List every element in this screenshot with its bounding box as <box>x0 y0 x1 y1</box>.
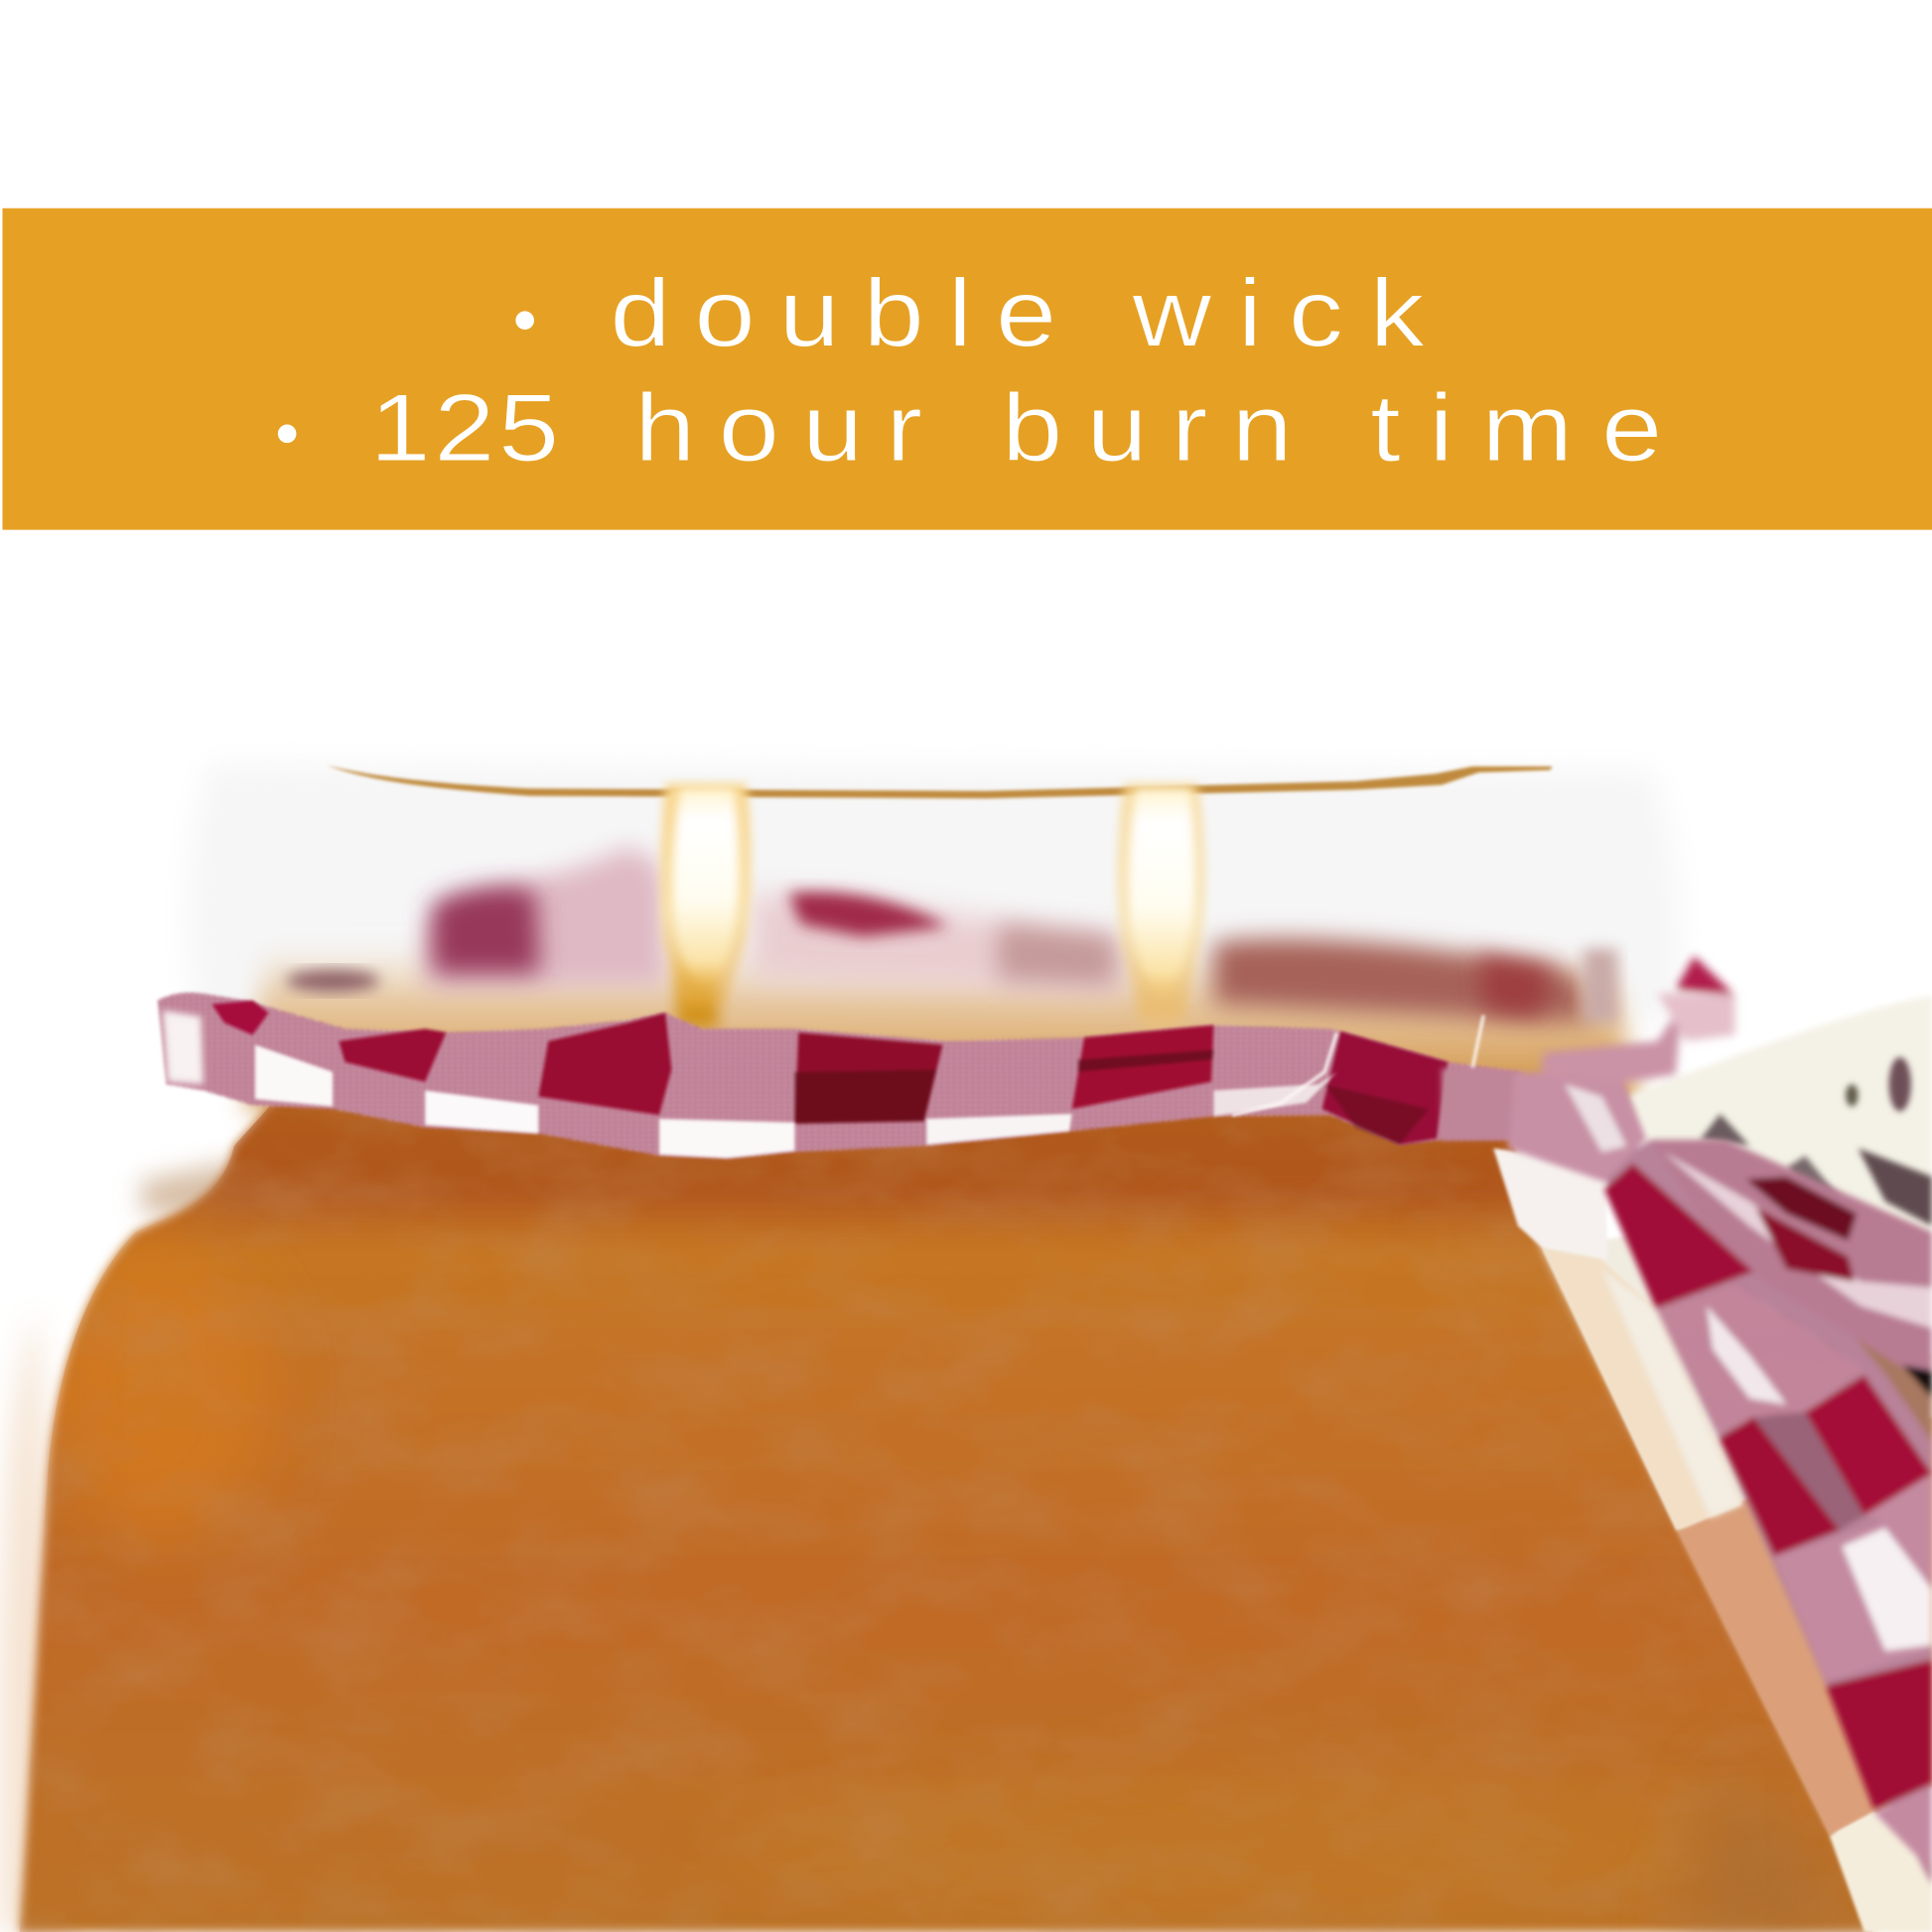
banner background <box>2 208 1932 530</box>
banner <box>2 208 1932 530</box>
tag edge backing: cream, peach and shadow <box>1543 1232 1932 1530</box>
flames <box>660 783 1205 1029</box>
frayed threads <box>1232 1016 1483 1115</box>
feature line: double wick: double <box>610 259 1056 366</box>
feature line: 125 hour burn time: 125 <box>369 373 559 482</box>
feature line: 125 hour burn time <box>278 373 1662 482</box>
tag print marks <box>1701 1057 1932 1226</box>
crimson checks <box>211 1001 1448 1145</box>
flame: right wick <box>1117 783 1205 1029</box>
feature line: 125 hour burn time: time <box>1370 373 1662 482</box>
knot <box>1442 1068 1514 1140</box>
wax surface behind glass <box>246 942 1639 1109</box>
hang tag <box>1493 996 1932 1932</box>
loose ribbon end <box>1540 956 1734 1084</box>
glass jar rim <box>187 763 1680 1109</box>
lower tail checks <box>1604 1164 1932 1871</box>
tail backing <box>1601 1140 1932 1885</box>
feature line: double wick: wick <box>1131 259 1426 366</box>
gingham ribbon band <box>158 993 1522 1159</box>
blurred ribbon reflections <box>286 849 1618 1023</box>
tag face <box>1626 996 1932 1282</box>
feature line: 125 hour burn time: burn <box>1002 373 1293 482</box>
band base <box>158 993 1522 1159</box>
ribbon knot and tails <box>1442 956 1932 1885</box>
tag edge: lower white section <box>1830 1811 1932 1932</box>
feature line: 125 hour burn time: hour <box>634 373 922 482</box>
tag edge: white section <box>1493 1149 1608 1259</box>
candle photo <box>0 763 1932 1932</box>
feature line: double wick <box>515 259 1426 366</box>
golden wax rim line <box>327 765 1553 798</box>
flame: left wick <box>660 783 752 1029</box>
jar body <box>0 1084 1932 1932</box>
tag edge: cream section <box>1543 1248 1742 1530</box>
upper tail <box>1651 1140 1932 1399</box>
white checks <box>163 1011 1337 1159</box>
body shading and mottling <box>0 1084 1932 1932</box>
